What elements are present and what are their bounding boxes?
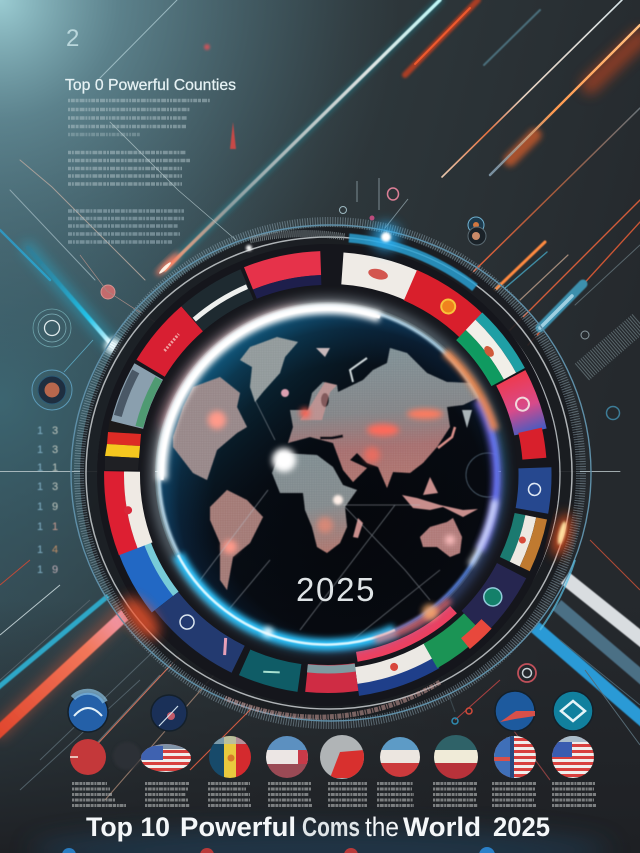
ring marker [452, 664, 536, 724]
rim highlight: orange upper right [445, 352, 495, 430]
streak: faint blue [484, 10, 540, 65]
flare: white bottom [263, 627, 273, 637]
small ring icons upper right [340, 178, 620, 420]
right hatched patch [582, 322, 640, 372]
beam: grey-blue lower right [557, 605, 640, 680]
icon: blue white red band [380, 737, 420, 777]
flag: small red [530, 430, 535, 459]
numeric column left: 3 [52, 481, 58, 493]
flag: red to blue with ring emblem [507, 375, 538, 433]
rim highlight: right white [470, 500, 495, 565]
flag: red [149, 317, 192, 368]
icon: US flag circle [552, 736, 594, 778]
globe [156, 303, 510, 650]
outer line ring [71, 225, 591, 721]
caption 7 [433, 784, 478, 806]
country icon row 2 [70, 735, 594, 779]
flag: navy with teal emblem [466, 566, 519, 628]
rim highlight: pink lower right [375, 600, 450, 640]
flag: small orange red [465, 624, 487, 644]
cyan light beam [28, 248, 121, 354]
blue arc top right [250, 234, 575, 630]
outer ring system [71, 222, 591, 724]
beam: blue lower right [535, 627, 640, 722]
numeric column left: 1 [37, 462, 43, 474]
flag: grey green [115, 367, 160, 429]
continent: Australia [420, 518, 462, 557]
icon: dark blue circle with red dot [151, 695, 187, 731]
numeric column left: 1 [52, 521, 58, 533]
continents [170, 337, 510, 650]
rim highlight: top left white [162, 309, 380, 480]
marker: red dot top left [204, 44, 210, 50]
ring glow: red tint upper left [172, 320, 300, 430]
heading: bottom title: Powerful [180, 812, 296, 842]
flag: blue with white emblem [527, 467, 542, 511]
flag: red with gold emblem [409, 276, 487, 337]
globe sphere [158, 305, 498, 645]
flag: navy with emblem [160, 594, 244, 667]
numeric column left: 4 [52, 544, 58, 556]
heading: bottom title: the [365, 812, 399, 842]
caption 9 [552, 784, 596, 806]
flare: red orange lower left [116, 591, 166, 645]
icon: teal circle with white diamond [553, 691, 593, 731]
continent: Eurasia [288, 348, 480, 488]
year fragment: 2: 2 [66, 25, 79, 52]
icon: dim globe [113, 742, 141, 770]
caption 2 [145, 784, 190, 806]
beam: white-teal diagonal [165, 0, 440, 270]
flag: German tricolour [105, 417, 143, 470]
streak: thin orange lines [495, 200, 640, 345]
icon: blue circle with white curves [68, 692, 108, 732]
map hot spots [208, 408, 455, 554]
numeric column left: 1 [37, 481, 43, 493]
numeric column left: 1 [37, 564, 43, 576]
left ring icons [32, 309, 93, 410]
lines lower middle [78, 650, 550, 800]
caption 4 [268, 784, 312, 806]
flag: white and blue [354, 650, 438, 694]
numeric column left: 1 [37, 501, 43, 513]
numeric column left [37, 425, 58, 576]
beam: cyan lower left [0, 596, 108, 690]
beam: lines lower left [0, 560, 160, 790]
heading: top title: Top 0 Powerful Counties [65, 77, 236, 94]
year fragment: blurred [96, 44, 106, 46]
white ring [86, 237, 572, 709]
thin diagonal lines upper left [0, 0, 236, 280]
heading: bottom title: Coms [302, 812, 360, 842]
flare: blue star top [372, 223, 400, 251]
lines lower right [560, 540, 640, 745]
caption 5 [328, 784, 367, 806]
flag: teal white green [458, 314, 523, 386]
flag: red and navy top [248, 260, 324, 295]
ring icon 1 [33, 309, 71, 347]
hatched ring [79, 222, 581, 724]
heading: bottom title: 2025 [493, 812, 550, 842]
streak: red diagonal [405, 0, 478, 75]
thin map lines [200, 400, 493, 638]
icon: teal cream red [434, 735, 478, 779]
flag: white with red emblem [342, 261, 414, 288]
numeric column left: 1 [37, 521, 43, 533]
globe outer glow [156, 303, 500, 647]
marker: red spike [230, 122, 236, 149]
streak: glowing orange [490, 25, 640, 175]
numeric column left: 1 [37, 425, 43, 437]
icon: blue yellow red [209, 736, 251, 778]
icon: US flag ellipse [141, 744, 191, 772]
caption 6 [377, 784, 414, 806]
numeric column left: 1 [37, 444, 43, 456]
text block 2 (illegible greeked lines) [68, 152, 190, 184]
flag: red and white with leaf [110, 468, 146, 552]
caption blocks (illegible greeked lines) [72, 784, 596, 806]
flag: green white orange [504, 511, 543, 569]
streak: grey to orange [470, 108, 640, 275]
beam: red orange lower left [0, 600, 135, 735]
text block 3 (illegible greeked lines) [68, 211, 184, 242]
flag: red with grey band [306, 668, 356, 679]
flag: green part [430, 623, 475, 657]
globe rim [159, 306, 497, 644]
heading: bottom title: Top 10 [86, 812, 170, 842]
heading: bottom title: World [403, 812, 481, 842]
marker: pink node [101, 285, 115, 299]
country icon row 1 [68, 691, 593, 732]
heading: bottom title [86, 812, 550, 842]
numeric column left: 3 [52, 425, 58, 437]
continent: Greenland [240, 337, 298, 402]
streak: white to orange [442, 0, 622, 177]
flag: blue and light stripes [131, 539, 177, 604]
dark ring band [93, 240, 567, 708]
icon: blue circle with red streak [495, 691, 535, 731]
icon: red circle [70, 739, 106, 775]
rim highlight: bottom cyan [178, 555, 395, 645]
continent: South America [210, 490, 263, 590]
bottom glow behind title [30, 828, 610, 853]
icon: blue white red [266, 736, 308, 778]
flag: dark and white stripe [191, 282, 248, 320]
flag stripe: red pink arc [357, 610, 457, 664]
beam: white lower right [565, 578, 640, 642]
flare: white point top [246, 245, 252, 251]
capsule shape [540, 284, 583, 328]
bottom edge partial icons [62, 847, 495, 853]
caption 8 [492, 784, 536, 806]
numeric column left: 3 [52, 444, 58, 456]
ring icon 2 [32, 370, 72, 410]
islands [281, 348, 478, 538]
lower beams [0, 540, 640, 800]
numeric column left: 1 [52, 462, 58, 474]
flag: dark teal [244, 662, 299, 682]
numeric column left: 9 [52, 501, 58, 513]
caption 1 [72, 784, 126, 806]
icon: white grey red [320, 735, 364, 779]
flare: orange rim lower right [422, 604, 438, 620]
light streaks upper area [0, 0, 640, 472]
hatched ticker ring bottom [225, 682, 440, 717]
rim highlight: right violet [478, 400, 497, 550]
continent: North America [173, 377, 247, 480]
year label: 2025 [296, 571, 376, 608]
flare: orange right [550, 512, 574, 558]
ring background under flags [126, 273, 530, 677]
flag ring [105, 260, 543, 694]
horizontal scan line [0, 470, 620, 472]
spark: orange comet [154, 250, 182, 278]
continent: Africa [272, 453, 357, 553]
icon: blue and red stripes [494, 736, 536, 778]
numeric column left: 1 [37, 544, 43, 556]
numeric column left: 9 [52, 564, 58, 576]
vertical light line [248, 0, 250, 258]
text block 1 (illegible greeked lines) [68, 100, 210, 134]
inner white ring [98, 249, 560, 699]
caption 3 [208, 784, 251, 806]
